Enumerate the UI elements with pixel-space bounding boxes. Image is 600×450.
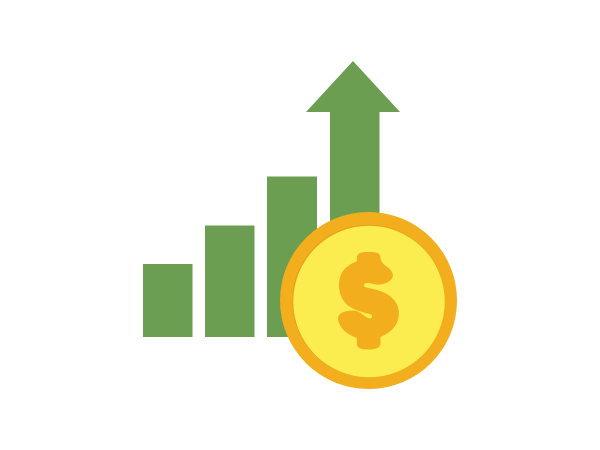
icon: dollar coin [280, 212, 457, 389]
icon: upward arrow [306, 61, 400, 240]
coin rim [280, 212, 457, 389]
coin face [293, 226, 445, 377]
bar 2 [205, 226, 254, 337]
bar 3 [267, 176, 317, 337]
bar 1 [143, 264, 192, 337]
dollar sign [338, 252, 398, 349]
coin inner shadow [292, 225, 445, 377]
